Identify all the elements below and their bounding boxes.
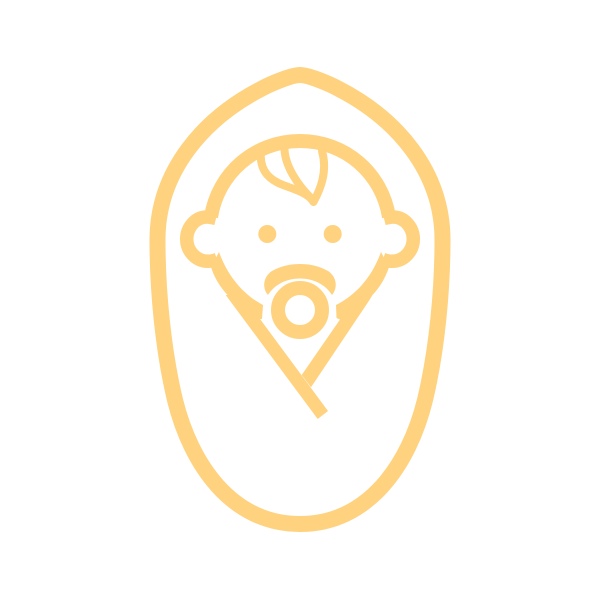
eye left <box>258 225 276 243</box>
hair strand <box>284 147 313 200</box>
eye right <box>324 225 342 243</box>
swaddle blanket outline <box>158 75 442 524</box>
baby head <box>187 141 413 261</box>
left ear <box>187 217 217 261</box>
cheek and long swaddle strap <box>211 252 328 419</box>
hair curl <box>261 151 324 202</box>
cheek and short swaddle strap <box>302 252 389 387</box>
pacifier shield <box>264 264 336 295</box>
head outline <box>211 141 389 217</box>
pacifier ring <box>278 288 322 332</box>
right ear <box>383 217 413 261</box>
